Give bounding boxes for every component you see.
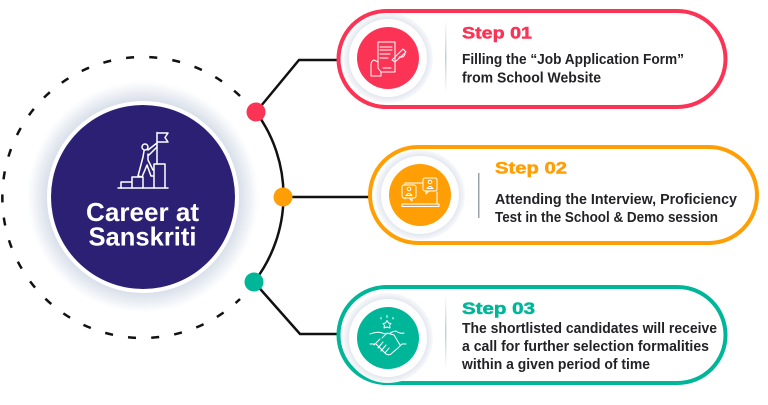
- icon halo: [343, 13, 433, 103]
- panel: step 3: a call for further selection formalities: [462, 338, 709, 355]
- connector: step 3: [254, 282, 340, 334]
- step description: Filling the “Job Application Form”: [462, 51, 684, 68]
- icon: climber with flag on steps: [118, 132, 168, 188]
- central badge: Sanskriti: [88, 222, 196, 252]
- icon halo: [375, 150, 465, 240]
- panel: step 2: Test in the School & Demo session: [495, 209, 718, 226]
- panel: step 3: within a given period of time: [461, 356, 650, 373]
- panel: step 2: [370, 147, 757, 243]
- panel: step 1: from School Website: [462, 70, 601, 86]
- icon: video interview on laptop: [402, 178, 439, 206]
- divider: [445, 20, 446, 94]
- dashed orbit ring: [2, 57, 240, 338]
- divider: [478, 173, 480, 218]
- node: green dot: [244, 272, 264, 292]
- step description: Attending the Interview, Proficiency: [495, 191, 738, 208]
- icon: handshake with star: [370, 316, 406, 355]
- divider: [445, 294, 446, 370]
- connector: step 2: [283, 196, 372, 198]
- step label: Step 02: [495, 158, 567, 178]
- panel: step 1: [338, 11, 726, 107]
- step label: Step 01: [462, 24, 532, 42]
- node: pink dot: [246, 102, 266, 122]
- panel: step 3: [338, 287, 726, 383]
- node: orange dot: [274, 188, 292, 206]
- step label: Step 03: [462, 299, 535, 318]
- icon: application form on tablet: [371, 42, 406, 76]
- connector: step 1: [256, 60, 340, 112]
- step description: The shortlisted candidates will receive: [462, 320, 717, 337]
- badge title: Career at: [86, 197, 199, 227]
- central badge: [27, 81, 259, 313]
- solid connector arc: [254, 112, 284, 282]
- icon halo: [343, 293, 433, 383]
